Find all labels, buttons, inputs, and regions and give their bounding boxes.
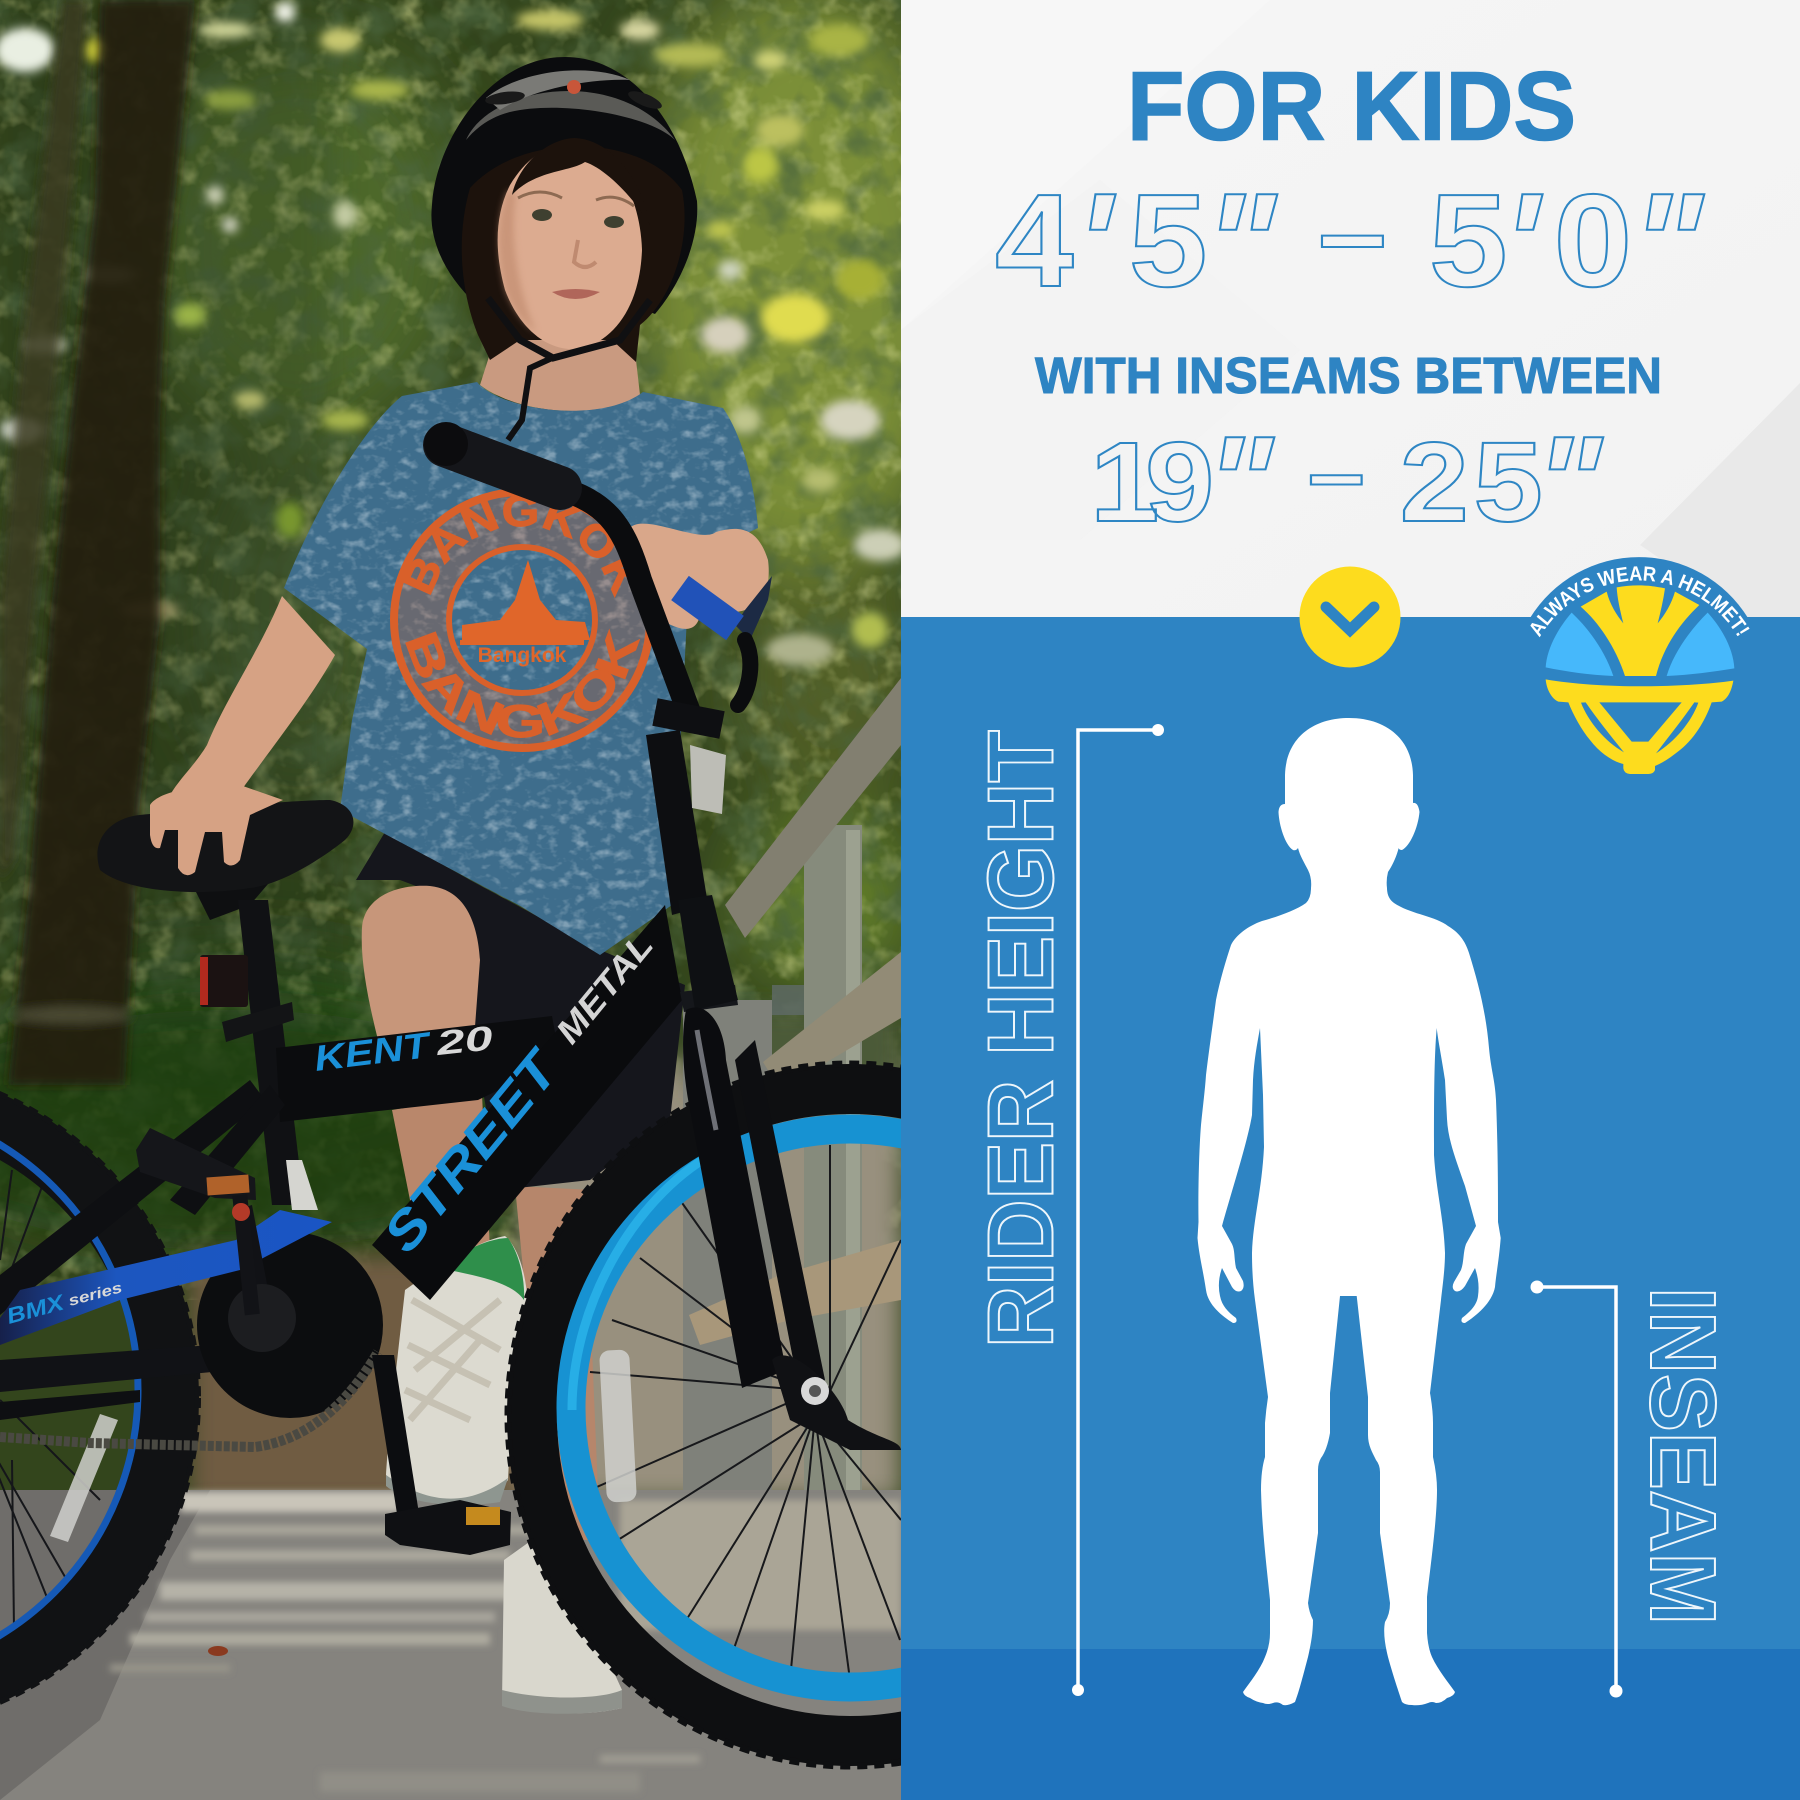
subheading: inseams: WITH INSEAMS BETWEEN	[1035, 347, 1662, 404]
rider height bracket	[1072, 724, 1164, 1696]
icon: always wear a helmet badge	[1530, 557, 1750, 774]
frame lettering: KENT	[312, 1024, 435, 1079]
outlined height range: '	[1502, 165, 1543, 323]
shirt print: BANGKOK	[405, 628, 640, 738]
front leg and knee	[362, 886, 490, 1250]
outlined height range: 5	[1129, 166, 1207, 314]
rear wheel	[0, 1066, 198, 1730]
outlined inseam range: 2	[1400, 419, 1469, 546]
panel: blue rider diagram background	[901, 617, 1800, 1800]
outlined inseam range: "	[1206, 409, 1275, 554]
boy	[172, 57, 772, 1714]
outlined height range: "	[1204, 165, 1278, 323]
head and helmet	[431, 57, 697, 440]
outlined inseam range: 5	[1474, 419, 1543, 546]
frame lettering: 20	[433, 1019, 495, 1063]
railing and posts	[683, 678, 901, 1490]
outlined inseam range: 9	[1145, 419, 1214, 546]
shirt print: Bangkok	[478, 644, 567, 667]
shirt print: BANGKOK	[404, 496, 626, 598]
forearm and hand on handlebar	[628, 524, 769, 629]
outlined height range: 4	[995, 166, 1074, 314]
frame lettering: STREET	[373, 1038, 573, 1264]
top tube	[276, 1016, 560, 1122]
seat	[97, 785, 353, 920]
pavement	[0, 1490, 901, 1800]
panel: light heading background	[901, 0, 1800, 618]
bokeh highlights	[0, 2, 906, 666]
frame lettering	[4, 927, 661, 1329]
shirt print	[390, 490, 652, 752]
outlined inseam range: –	[1308, 421, 1365, 525]
crank and lower pedal	[372, 1355, 511, 1555]
upper pedal	[136, 1128, 260, 1315]
frame lettering: BMX	[4, 1289, 68, 1329]
tree trunks	[0, 0, 195, 1085]
outlined height range: '	[1075, 165, 1116, 323]
shorts	[356, 832, 685, 1188]
floor band	[901, 1649, 1800, 1800]
chain	[0, 1352, 378, 1447]
chainring	[197, 1232, 383, 1418]
rear leg and shoe	[502, 1186, 622, 1714]
icon: always wear a helmet badge: ALWAYS WEAR A HELMET!	[1530, 566, 1750, 638]
stays	[0, 1080, 265, 1315]
dark foliage behind bike	[0, 1010, 560, 1250]
arm on seat	[170, 596, 335, 800]
inseam label: INSEAM	[1631, 1287, 1735, 1625]
outlined inseam range: 1	[1090, 419, 1159, 546]
seat post and seat tube	[238, 900, 304, 1205]
panel: photo of boy with bicycle	[0, 0, 901, 1800]
outlined height range: 5	[1429, 166, 1508, 314]
child silhouette	[1198, 718, 1501, 1705]
down tube	[372, 905, 682, 1300]
rider height label: RIDER HEIGHT	[968, 730, 1072, 1348]
bicycle frame	[0, 730, 738, 1555]
icon: yellow chevron badge	[1300, 566, 1400, 668]
shoe	[386, 1236, 528, 1505]
front wheel	[508, 1064, 1192, 1766]
chain guard	[0, 1210, 332, 1345]
outlined height range: –	[1318, 169, 1387, 297]
t-shirt	[284, 382, 758, 955]
inseam bracket	[1530, 1280, 1622, 1698]
handlebar	[424, 422, 750, 725]
frame lettering: METAL	[549, 927, 661, 1051]
neck	[480, 340, 640, 411]
heading: FOR KIDS: FOR KIDS	[1127, 52, 1576, 160]
outlined height range: "	[1631, 165, 1705, 323]
frame lettering: series	[67, 1279, 124, 1310]
head tube and stem	[646, 730, 708, 915]
outlined inseam range: "	[1535, 409, 1604, 554]
fork	[683, 1007, 901, 1450]
pavement edge, leaves and gravel	[190, 1255, 560, 1505]
forest background	[0, 0, 970, 1505]
hand on seat	[150, 785, 283, 875]
outlined height range: 0	[1554, 166, 1632, 314]
